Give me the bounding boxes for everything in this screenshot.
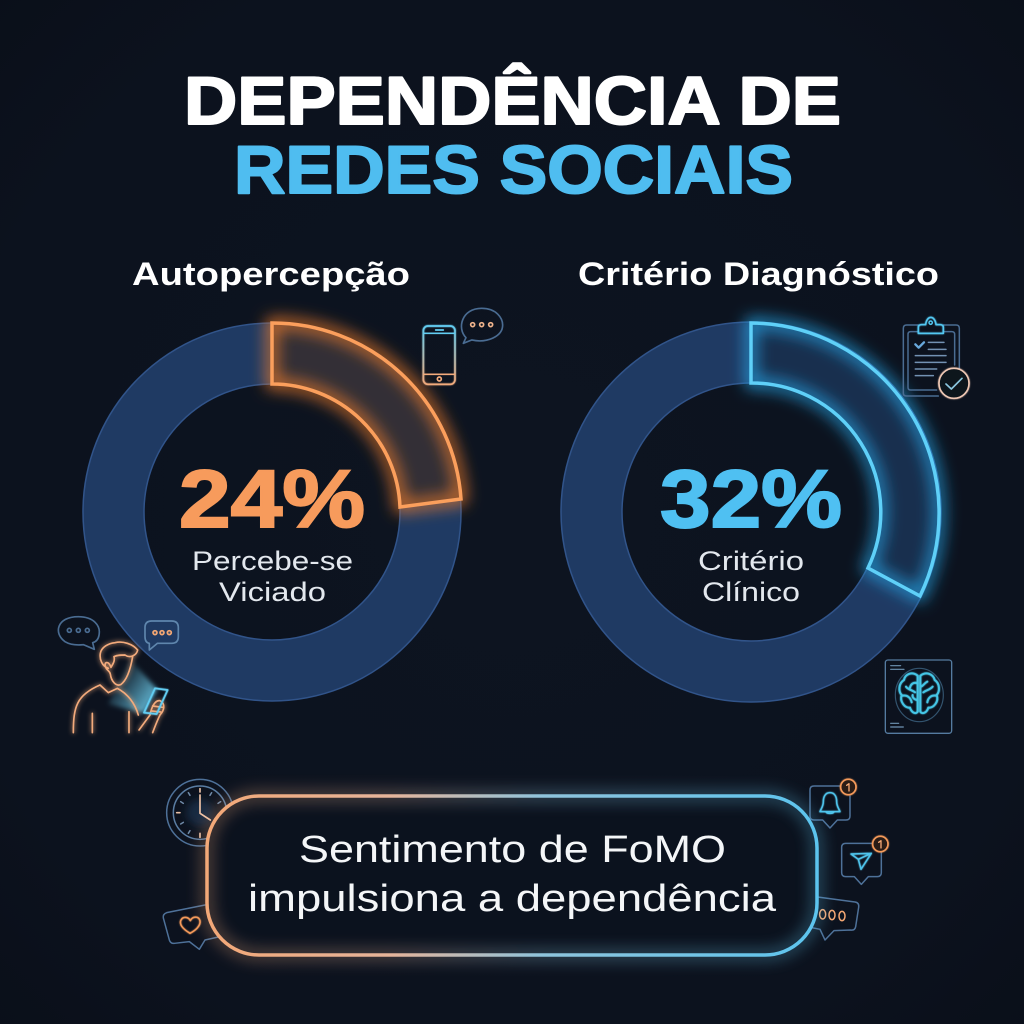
icon: person using phone <box>58 617 178 733</box>
icon: typing bubble <box>807 896 859 940</box>
value: 32%: 32% <box>660 454 842 545</box>
chat bubble right <box>145 621 178 650</box>
label: Critério Clínico: Critério <box>698 546 804 576</box>
icon: send notification <box>842 836 888 884</box>
icon: heart notification <box>163 905 220 949</box>
title <box>184 62 841 208</box>
label: Percebe-se Viciado <box>192 546 353 607</box>
donut chart: Autopercepção 24% <box>83 323 461 701</box>
callout: FoMO <box>207 796 817 955</box>
callout: FoMO: Sentimento de FoMO <box>299 829 726 871</box>
heading: Critério Diagnóstico: Critério Diagnóstico <box>578 256 939 292</box>
value: 24%: 24% <box>179 454 365 545</box>
title: REDES SOCIAIS <box>234 132 793 208</box>
label: Percebe-se Viciado: Viciado <box>219 577 326 607</box>
icon: bell notification <box>810 779 856 828</box>
title: DEPENDÊNCIA DE <box>184 62 841 139</box>
callout: FoMO: impulsiona a dependência <box>248 878 777 920</box>
icon: brain scan <box>885 660 952 733</box>
person outline <box>73 642 164 733</box>
label: Percebe-se Viciado: Percebe-se <box>192 546 353 576</box>
icon: phone with chat bubble <box>423 308 503 384</box>
icon: clock <box>167 779 233 846</box>
phone in hand <box>144 688 168 714</box>
icon: clipboard with check <box>903 317 969 398</box>
heading: Autopercepção: Autopercepção <box>132 256 410 292</box>
label: Critério Clínico: Clínico <box>702 577 800 607</box>
chat bubble left <box>58 617 99 649</box>
donut chart: Critério Diagnóstico 32% <box>561 322 941 702</box>
label: Critério Clínico <box>698 546 804 607</box>
